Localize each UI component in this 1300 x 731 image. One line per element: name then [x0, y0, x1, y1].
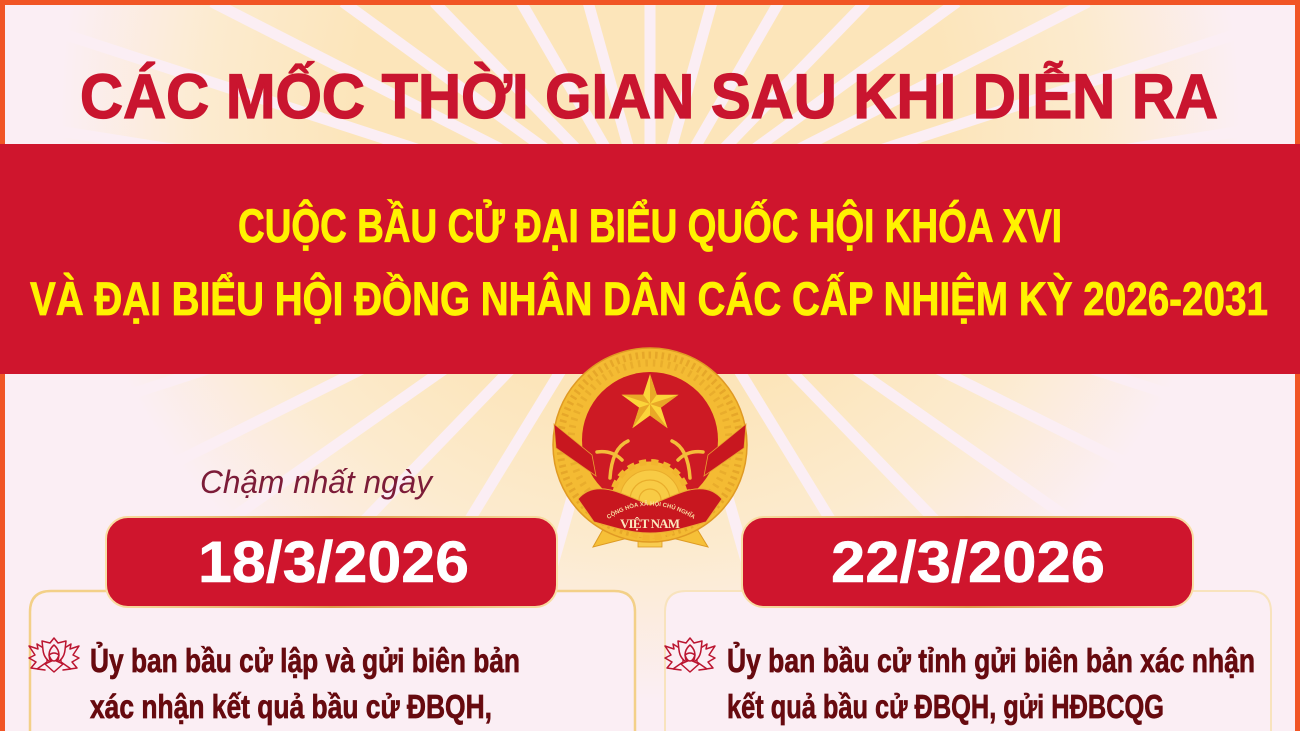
- left panel text: [90, 642, 520, 725]
- date text left: 18/3/2026: [198, 530, 469, 595]
- emblem banner ribbon: [578, 488, 722, 534]
- right panel text: kết quả bầu cử ĐBQH, gửi HĐBCQG: [727, 688, 1164, 725]
- emblem star: [622, 374, 678, 428]
- emblem red field: [582, 372, 718, 508]
- date badge: 18/3/2026: [106, 517, 557, 607]
- date badge: 22/3/2026: [742, 517, 1193, 607]
- emblem gear: [612, 462, 688, 538]
- panel: right milestone box: [665, 591, 1271, 731]
- icon: lotus left: [29, 638, 79, 672]
- emblem rice sprigs: [597, 441, 703, 478]
- left panel text: xác nhận kết quả bầu cử ĐBQH,: [90, 688, 492, 725]
- national emblem: [552, 347, 748, 548]
- panel: left milestone box: [30, 591, 635, 731]
- emblem tail: [593, 524, 708, 547]
- left panel text: Ủy ban bầu cử lập và gửi biên bản: [90, 642, 520, 679]
- banner heading line 1: CUỘC BẦU CỬ ĐẠI BIỂU QUỐC HỘI KHÓA XVI: [238, 199, 1062, 252]
- title: CÁC MỐC THỜI GIAN SAU KHI DIỄN RA: [80, 61, 1218, 132]
- deadline label: Chậm nhất ngày: [200, 464, 434, 500]
- red banner: [0, 144, 1300, 374]
- emblem motto: CỘNG HÒA XÃ HỘI CHỦ NGHĨA: [607, 500, 694, 519]
- emblem wreath: [553, 348, 747, 542]
- emblem side ribbons: [554, 424, 746, 476]
- emblem country name: VIỆT NAM: [620, 516, 680, 531]
- date text right: 22/3/2026: [831, 530, 1105, 595]
- right panel text: [727, 642, 1255, 725]
- icon: lotus right: [665, 638, 715, 672]
